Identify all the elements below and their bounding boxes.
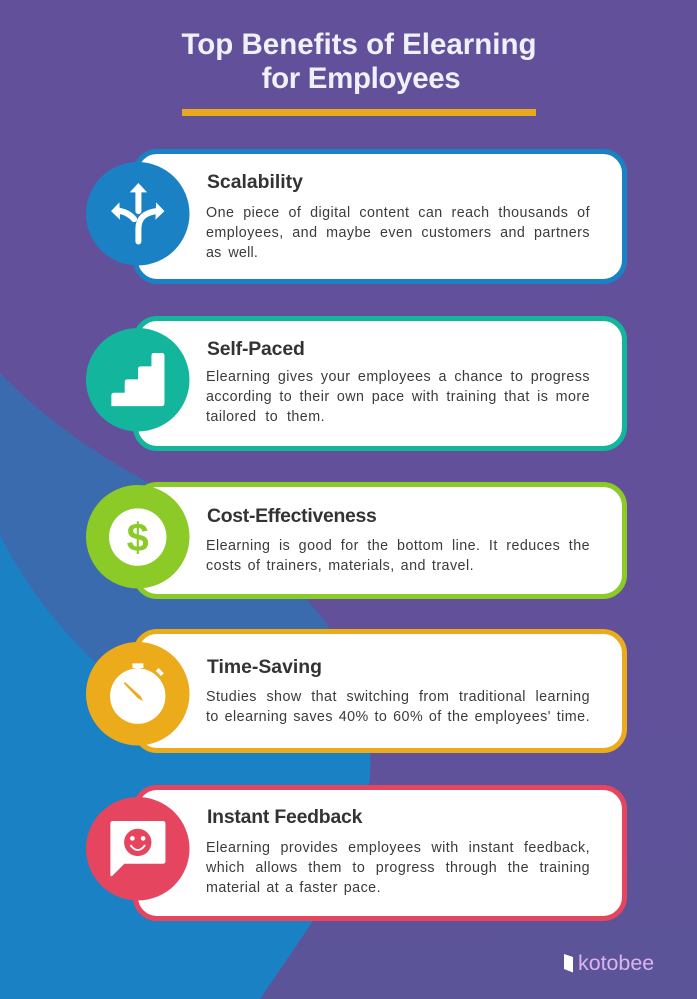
body text: which allows them to progress through the training xyxy=(206,860,590,876)
body text: Elearning gives your employees a chance to progress xyxy=(206,369,590,385)
heading: Scalability xyxy=(207,171,303,193)
body text: Studies show that switching from traditional learning xyxy=(206,689,590,705)
logo: kotobee xyxy=(564,951,654,975)
icon: dollar coin xyxy=(86,485,190,588)
card outline xyxy=(133,482,627,599)
card outline xyxy=(133,785,627,921)
body text: employees, and maybe even customers and partners xyxy=(206,225,590,241)
panel: cost-effectiveness xyxy=(86,482,627,599)
body text: One piece of digital content can reach thousands of xyxy=(206,205,590,221)
icon: dollar coin: $ xyxy=(127,516,149,560)
heading: Instant Feedback xyxy=(207,806,362,828)
heading: Time-Saving xyxy=(207,656,322,678)
icon: book xyxy=(564,954,573,972)
title: for Employees xyxy=(262,62,460,95)
title: Top Benefits of Elearning xyxy=(181,28,537,61)
title xyxy=(181,28,537,95)
wordmark: kotobee xyxy=(578,951,654,975)
card outline xyxy=(133,149,627,284)
panel: time-saving xyxy=(86,629,627,753)
icon: smiley speech bubble xyxy=(86,797,190,900)
body text: according to their own pace with training that is more xyxy=(206,389,590,405)
panel: instant feedback xyxy=(86,785,627,921)
body text xyxy=(206,538,590,574)
body text: tailored to them. xyxy=(206,409,325,425)
body text: as well. xyxy=(206,245,258,261)
body text: to elearning saves 40% to 60% of the employees' time. xyxy=(206,709,590,725)
body text xyxy=(206,369,590,425)
body text: Elearning provides employees with instant feedback, xyxy=(206,840,590,856)
heading: Cost-Effectiveness xyxy=(207,505,377,527)
body text xyxy=(206,840,590,896)
icon: diverging arrows xyxy=(86,162,190,266)
body text: costs of trainers, materials, and travel. xyxy=(206,558,474,574)
body text xyxy=(206,205,590,261)
body text: Elearning is good for the bottom line. It reduces the xyxy=(206,538,590,554)
card outline xyxy=(133,316,627,451)
panel: scalability xyxy=(86,149,627,284)
heading: Self-Paced xyxy=(207,338,305,360)
icon: stopwatch xyxy=(86,642,190,746)
panel: self-paced xyxy=(86,316,627,451)
card outline xyxy=(133,629,627,753)
title underline xyxy=(182,109,536,116)
body text: material at a faster pace. xyxy=(206,880,381,896)
icon: stairs xyxy=(86,328,190,432)
body text xyxy=(206,689,590,725)
